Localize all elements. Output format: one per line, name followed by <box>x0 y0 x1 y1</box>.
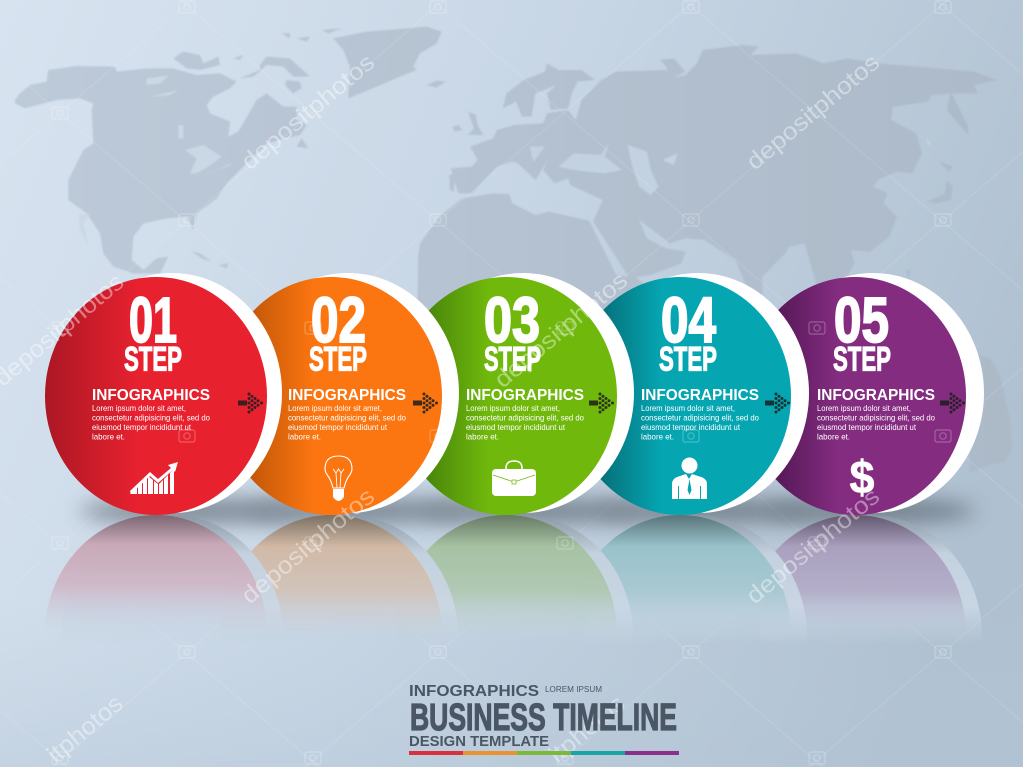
step label: STEP <box>484 340 541 378</box>
step number 04: 04 <box>661 284 716 356</box>
step number 01: 01 <box>129 284 177 356</box>
body text: consectetur adipisicing elit, sed do <box>641 412 759 422</box>
body text: consectetur adipisicing elit, sed do <box>288 412 406 422</box>
arrow <box>765 392 790 414</box>
panel: step 05 purple <box>744 273 984 515</box>
body text: consectetur adipisicing elit, sed do <box>817 412 935 422</box>
watermark text: depositphotos <box>741 483 885 610</box>
icon: light bulb <box>325 456 352 501</box>
body text: Lorem ipsum dolor sit amet, <box>466 403 560 413</box>
body text <box>817 403 935 442</box>
watermark text: depositphotos <box>236 49 380 176</box>
body text: labore et. <box>288 432 321 442</box>
rainbow rule <box>409 751 679 755</box>
watermark text: itphotos <box>42 690 128 767</box>
icon: dollar: $ <box>850 451 874 503</box>
title block <box>409 683 679 755</box>
body text: eiusmod tempor incididunt ut <box>466 422 566 432</box>
body text: eiusmod tempor incididunt ut <box>641 422 741 432</box>
heading: INFOGRAPHICS <box>466 387 584 404</box>
body text: Lorem ipsum dolor sit amet, <box>641 403 735 413</box>
icon: businessman <box>672 458 707 499</box>
panel: step 04 teal <box>569 273 809 515</box>
body text <box>288 403 406 442</box>
body text: eiusmod tempor incididunt ut <box>92 422 192 432</box>
watermark text: depositphotos <box>236 483 380 610</box>
step label: STEP <box>659 340 717 378</box>
map: north america, greenland and arctic islands <box>15 27 446 273</box>
watermark text: depositphotos <box>489 267 633 394</box>
map: eurasia, africa and islands <box>417 45 997 363</box>
step label: STEP <box>833 340 891 378</box>
reflection: green disc <box>395 515 633 757</box>
panel: step 01 red <box>45 273 282 515</box>
step number 03: 03 <box>484 284 540 356</box>
title: lorem ipsum: LOREM IPSUM <box>545 684 602 694</box>
body text: labore et. <box>92 432 125 442</box>
title: business timeline: BUSINESS TIMELINE <box>410 697 677 739</box>
body text: labore et. <box>641 432 674 442</box>
body text <box>641 403 759 442</box>
floor shadow <box>80 498 975 524</box>
step number 05: 05 <box>834 284 889 356</box>
body text <box>92 403 210 442</box>
body text: Lorem ipsum dolor sit amet, <box>92 403 186 413</box>
watermark text: itphotos <box>544 690 630 767</box>
arrow <box>238 392 263 414</box>
step number 02: 02 <box>311 284 366 356</box>
panel: step 03 green <box>395 273 634 515</box>
reflection: orange disc <box>220 515 458 757</box>
reflection: teal disc <box>569 515 807 757</box>
icon: briefcase <box>492 461 536 496</box>
world map <box>15 27 1012 472</box>
title: infographics: INFOGRAPHICS <box>409 683 539 700</box>
reflection: red disc <box>45 515 283 757</box>
reflections of the discs <box>45 515 982 757</box>
title: design template: DESIGN TEMPLATE <box>409 734 549 750</box>
body text: eiusmod tempor incididunt ut <box>817 422 917 432</box>
body text: labore et. <box>817 432 850 442</box>
body text: Lorem ipsum dolor sit amet, <box>288 403 382 413</box>
heading: INFOGRAPHICS <box>641 387 759 404</box>
arrow <box>589 392 614 414</box>
body text: consectetur adipisicing elit, sed do <box>466 412 584 422</box>
step label: STEP <box>309 340 367 378</box>
icon: growth chart <box>130 462 178 494</box>
arrow <box>413 392 438 414</box>
panel: step 02 orange <box>220 273 459 515</box>
body text: Lorem ipsum dolor sit amet, <box>817 403 911 413</box>
body text: eiusmod tempor incididunt ut <box>288 422 388 432</box>
heading: INFOGRAPHICS <box>92 387 210 404</box>
heading: INFOGRAPHICS <box>817 387 935 404</box>
body text: consectetur adipisicing elit, sed do <box>92 412 210 422</box>
watermark text: depositphotos <box>741 49 885 176</box>
body text <box>466 403 584 442</box>
map: australia <box>970 355 1012 472</box>
step label: STEP <box>124 340 182 378</box>
heading: INFOGRAPHICS <box>288 387 406 404</box>
reflection: purple disc <box>744 515 982 757</box>
body text: labore et. <box>466 432 499 442</box>
arrow <box>940 392 965 414</box>
